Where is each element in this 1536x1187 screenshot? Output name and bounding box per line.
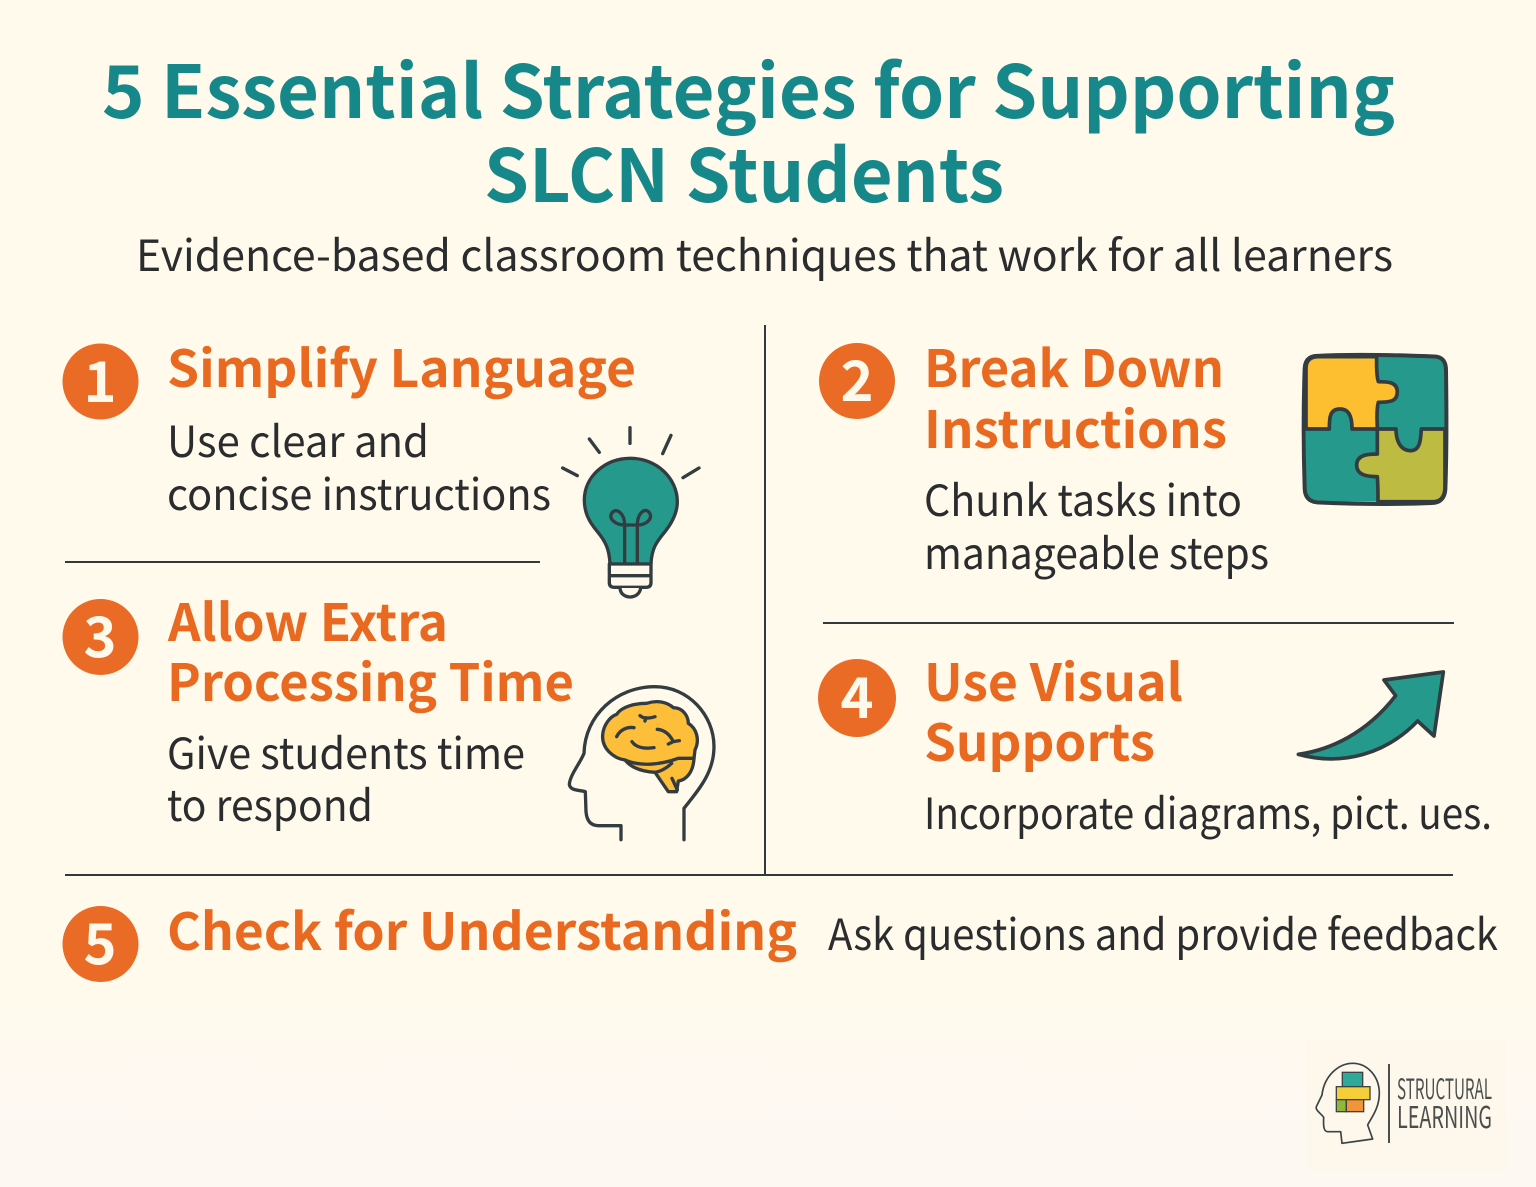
wordmark xyxy=(1397,1068,1492,1137)
heading: simplify language: Simplify Language xyxy=(167,328,636,402)
icon: jigsaw puzzle xyxy=(1304,355,1446,504)
panel: strategy 5 check for understanding xyxy=(62,891,1498,982)
subtitle: Evidence-based classroom techniques that work for all learners xyxy=(136,222,1393,284)
icon: upward arrow xyxy=(1298,672,1443,759)
icon: head with brain xyxy=(569,687,714,840)
text: strategy 3 description xyxy=(167,720,525,834)
heading: allow extra processing time xyxy=(167,582,574,716)
number badge 5: 5 xyxy=(83,900,117,981)
number badge 3: 3 xyxy=(83,593,117,674)
panel: strategy 3 allow extra processing time xyxy=(62,582,714,840)
title xyxy=(102,34,1395,224)
title: 5 Essential Strategies for Supporting xyxy=(102,34,1395,140)
number badge 1: 1 xyxy=(83,338,117,419)
number badge 2: 2 xyxy=(840,337,874,418)
panel: strategy 4 use visual supports xyxy=(818,642,1492,842)
heading: use visual supports: Supports xyxy=(924,702,1155,776)
title: SLCN Students xyxy=(484,118,1004,224)
text: strategy 3 description: Give students time xyxy=(167,720,525,782)
number badge 3 xyxy=(62,593,138,675)
heading: use visual supports: Use Visual xyxy=(924,642,1183,716)
text: strategy 3 description: to respond xyxy=(167,772,373,834)
heading: use visual supports xyxy=(924,642,1183,776)
panel: strategy 1 simplify language xyxy=(62,328,699,597)
text: strategy 1 description: concise instructions xyxy=(167,461,551,523)
number badge 5 xyxy=(62,900,138,982)
heading: allow extra processing time: Processing Time xyxy=(167,642,574,716)
text: strategy 5 description: Ask questions and provide feedback xyxy=(828,901,1498,963)
heading: break down instructions: Break Down xyxy=(924,328,1224,402)
number badge 2 xyxy=(819,337,895,419)
text: strategy 2 description: manageable steps xyxy=(924,520,1269,582)
number badge 4 xyxy=(818,654,896,737)
number badge 1 xyxy=(62,338,138,420)
heading: check for understanding: Check for Understanding xyxy=(167,891,797,965)
icon: head with blocks xyxy=(1316,1063,1379,1143)
panel: strategy 2 break down instructions xyxy=(819,328,1446,582)
number badge 4: 4 xyxy=(840,654,874,735)
text: strategy 1 description: Use clear and xyxy=(167,408,429,470)
logo: structural learning xyxy=(1306,1040,1506,1172)
text: strategy 2 description xyxy=(924,467,1269,582)
text: strategy 2 description: Chunk tasks into xyxy=(924,467,1242,529)
heading: break down instructions xyxy=(924,328,1227,463)
text: strategy 1 description xyxy=(167,408,551,523)
heading: allow extra processing time: Allow Extra xyxy=(167,582,448,656)
icon: light bulb xyxy=(563,428,699,597)
heading: break down instructions: Instructions xyxy=(924,389,1227,463)
